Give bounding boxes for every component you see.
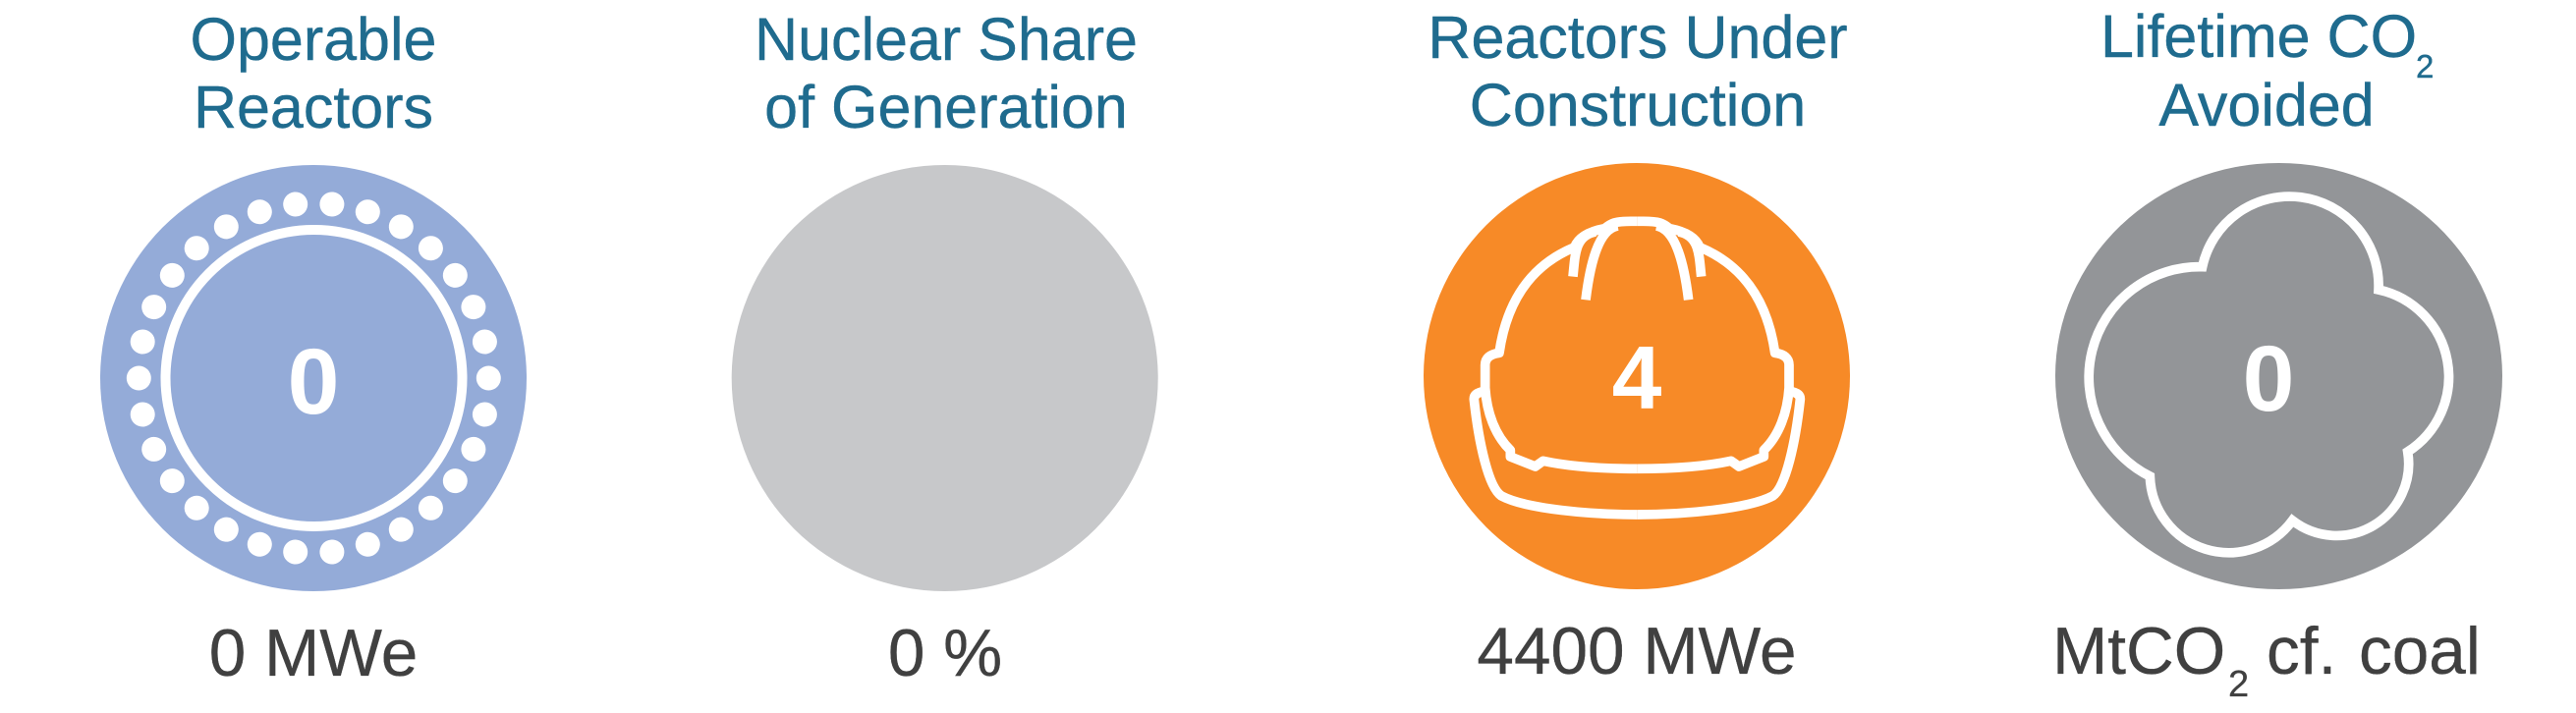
heading: nuclear share: Nuclear Share: [755, 6, 1138, 73]
heading: lifetime CO2 avoided: Lifetime CO: [2100, 3, 2417, 70]
icon: share circle: [732, 165, 1158, 591]
number: operable reactors count: 0: [288, 330, 339, 434]
heading: reactors under construction: Construction: [1470, 72, 1806, 138]
panel: operable reactors: [100, 6, 527, 690]
heading: operable reactors: Operable: [191, 6, 436, 73]
heading: lifetime CO2 avoided: 2: [2416, 48, 2434, 84]
icon: reactor circle: [100, 165, 527, 591]
number: reactors under construction count: 4: [1612, 329, 1662, 428]
value: CO2 unit: cf. coal: [2267, 615, 2481, 688]
heading: nuclear share: of Generation: [764, 74, 1128, 140]
heading: lifetime CO2 avoided: Avoided: [2158, 72, 2375, 138]
icon: gray circle with cloud: [2055, 163, 2502, 589]
heading: operable reactors: Reactors: [194, 74, 433, 140]
panel: reactors under construction: [1424, 4, 1850, 688]
panel: lifetime CO2 avoided: [2052, 3, 2502, 705]
icon: orange circle with hard hat: [1424, 163, 1850, 589]
value: CO2 unit: MtCO: [2052, 615, 2225, 688]
panel: nuclear share of generation: [732, 6, 1158, 690]
value: operable capacity: 0 MWe: [209, 617, 418, 690]
heading: reactors under construction: Reactors Under: [1428, 4, 1848, 71]
number: CO2 avoided: 0: [2243, 327, 2294, 431]
value: CO2 unit: 2: [2228, 664, 2249, 705]
value: construction capacity: 4400 MWe: [1477, 615, 1797, 688]
value: nuclear share percent: 0 %: [888, 617, 1002, 690]
